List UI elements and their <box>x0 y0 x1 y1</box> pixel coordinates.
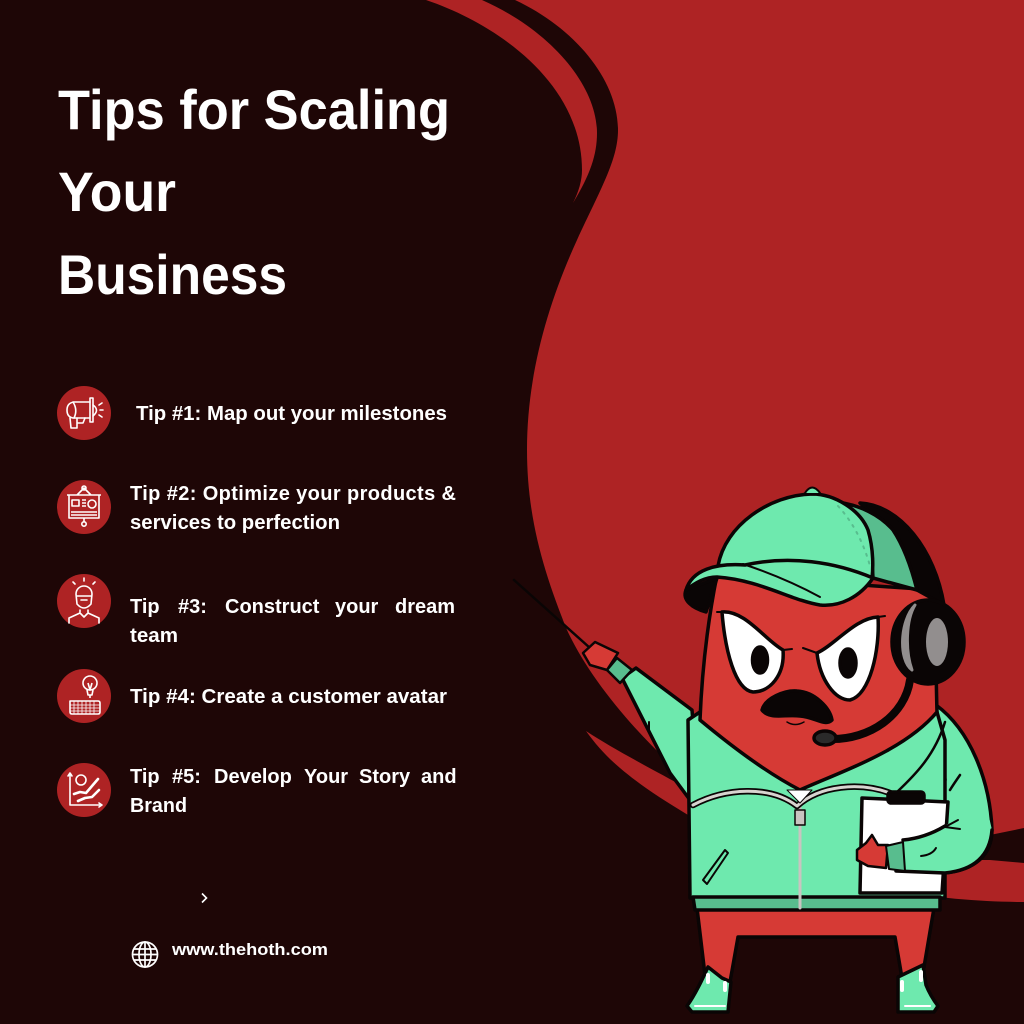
eyebrow ticks <box>717 612 885 653</box>
icon: presentation board <box>57 480 111 534</box>
pupils <box>752 647 768 673</box>
left eye <box>722 612 783 692</box>
tip 2: services to perfection <box>130 512 340 534</box>
cuff <box>607 658 632 683</box>
clipboard <box>860 798 948 893</box>
tip 5: and <box>421 766 457 788</box>
tip 4: Tip #4: Create a customer avatar <box>130 686 447 708</box>
jacket body <box>688 712 945 898</box>
cap dome <box>718 494 873 604</box>
title: Tips for Scaling <box>58 78 450 141</box>
icon: growth chart <box>57 763 111 817</box>
tip 3: #3: <box>178 596 207 618</box>
pointer stick <box>514 580 590 648</box>
head <box>700 575 937 790</box>
tip 3: your <box>335 596 379 618</box>
under brim <box>685 578 717 612</box>
icon: lightbulb and keyboard <box>57 669 111 723</box>
headphone <box>892 600 964 684</box>
website link <box>132 940 328 967</box>
moustache <box>762 691 832 722</box>
tip 2: Tip #2: Optimize your products & <box>130 483 456 505</box>
chevron <box>202 894 206 902</box>
mascot character <box>514 488 992 1012</box>
icon: person with idea <box>57 574 111 628</box>
title: Business <box>58 243 287 306</box>
title <box>58 78 450 306</box>
cap side panel <box>837 502 917 590</box>
microphone head <box>814 731 836 745</box>
collar trim <box>693 787 890 806</box>
tip 3: dream <box>395 596 455 618</box>
tip 3 <box>57 574 455 647</box>
headband <box>860 503 944 605</box>
holding hand <box>857 835 888 868</box>
sleeve cuff <box>886 842 905 871</box>
tip 5: Tip <box>130 766 160 788</box>
zipper <box>798 806 802 908</box>
right sleeve <box>900 705 992 873</box>
title: Your <box>58 160 176 223</box>
raised arm <box>622 668 700 805</box>
website link: www.thehoth.com <box>171 940 328 959</box>
left shoe <box>687 967 731 1012</box>
right shoe <box>898 965 938 1012</box>
microphone boom <box>830 680 910 739</box>
tip 5: Develop <box>214 766 292 788</box>
tip 2 <box>57 480 456 534</box>
legs <box>697 908 934 982</box>
tip 5: Story <box>359 766 411 788</box>
forearm <box>883 800 992 873</box>
cap button <box>805 488 820 493</box>
tip 5: #5: <box>172 766 201 788</box>
cap brim <box>686 560 873 605</box>
tip 5 <box>57 763 457 817</box>
tip 1 <box>57 386 447 440</box>
icon: globe <box>132 942 158 967</box>
right eye <box>817 617 878 700</box>
background: red wave shape <box>426 0 1024 902</box>
tip 4 <box>57 669 447 723</box>
tip 3: Construct <box>225 596 320 618</box>
tip 5: Your <box>304 766 348 788</box>
icon: megaphone <box>57 386 111 440</box>
pointing hand <box>583 642 618 670</box>
tip 1: Tip #1: Map out your milestones <box>136 403 447 425</box>
jacket hem <box>693 897 940 910</box>
tip 5: Brand <box>130 795 187 817</box>
tip 3: Tip <box>130 596 160 618</box>
tip 3: team <box>130 625 178 647</box>
jacket pocket <box>703 850 728 884</box>
collar lines <box>897 722 960 792</box>
clipboard clip <box>888 792 924 803</box>
